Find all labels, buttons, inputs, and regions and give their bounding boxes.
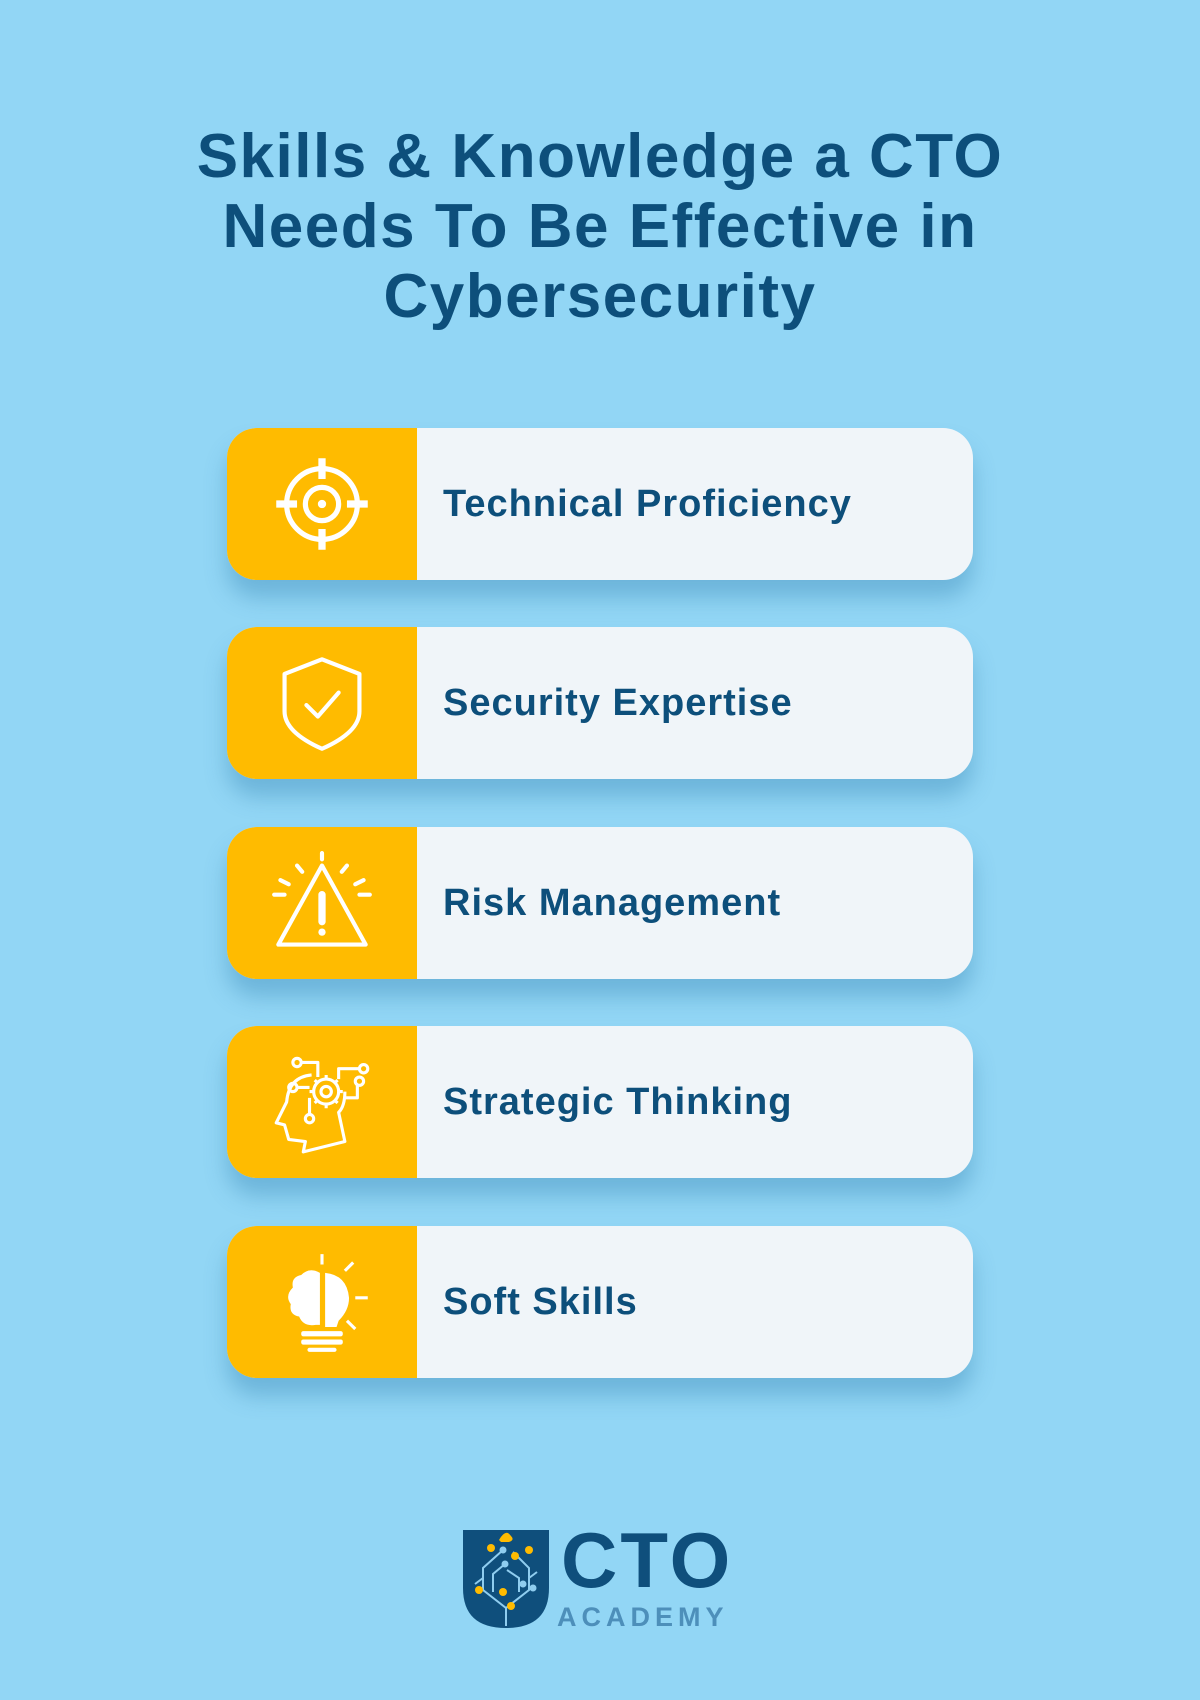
- icon: head with gear: [274, 1056, 370, 1154]
- card: strategic thinking: [227, 1026, 973, 1178]
- title: Skills & Knowledge a CTO: [197, 122, 1003, 191]
- icon: shield circuit: [463, 1530, 549, 1628]
- title: Needs To Be Effective in: [223, 192, 977, 261]
- icon: target: [276, 458, 368, 550]
- wordmark: CTO: [561, 1516, 733, 1604]
- icon: brain bulb: [288, 1254, 368, 1352]
- label: Soft Skills: [443, 1281, 638, 1323]
- title: Cybersecurity: [383, 262, 817, 331]
- logo: CTO Academy: ACADEMY: [557, 1602, 729, 1632]
- icon: shield: [282, 657, 362, 751]
- label: Technical Proficiency: [443, 483, 852, 525]
- label: Security Expertise: [443, 682, 793, 724]
- card: risk management: [227, 827, 973, 979]
- icon: warning: [272, 851, 372, 947]
- label: Strategic Thinking: [443, 1081, 792, 1123]
- title: [197, 122, 1003, 331]
- card: technical proficiency: [227, 428, 973, 580]
- card: soft skills: [227, 1226, 973, 1378]
- card: security expertise: [227, 627, 973, 779]
- logo: CTO Academy: [463, 1516, 733, 1632]
- label: Risk Management: [443, 882, 781, 924]
